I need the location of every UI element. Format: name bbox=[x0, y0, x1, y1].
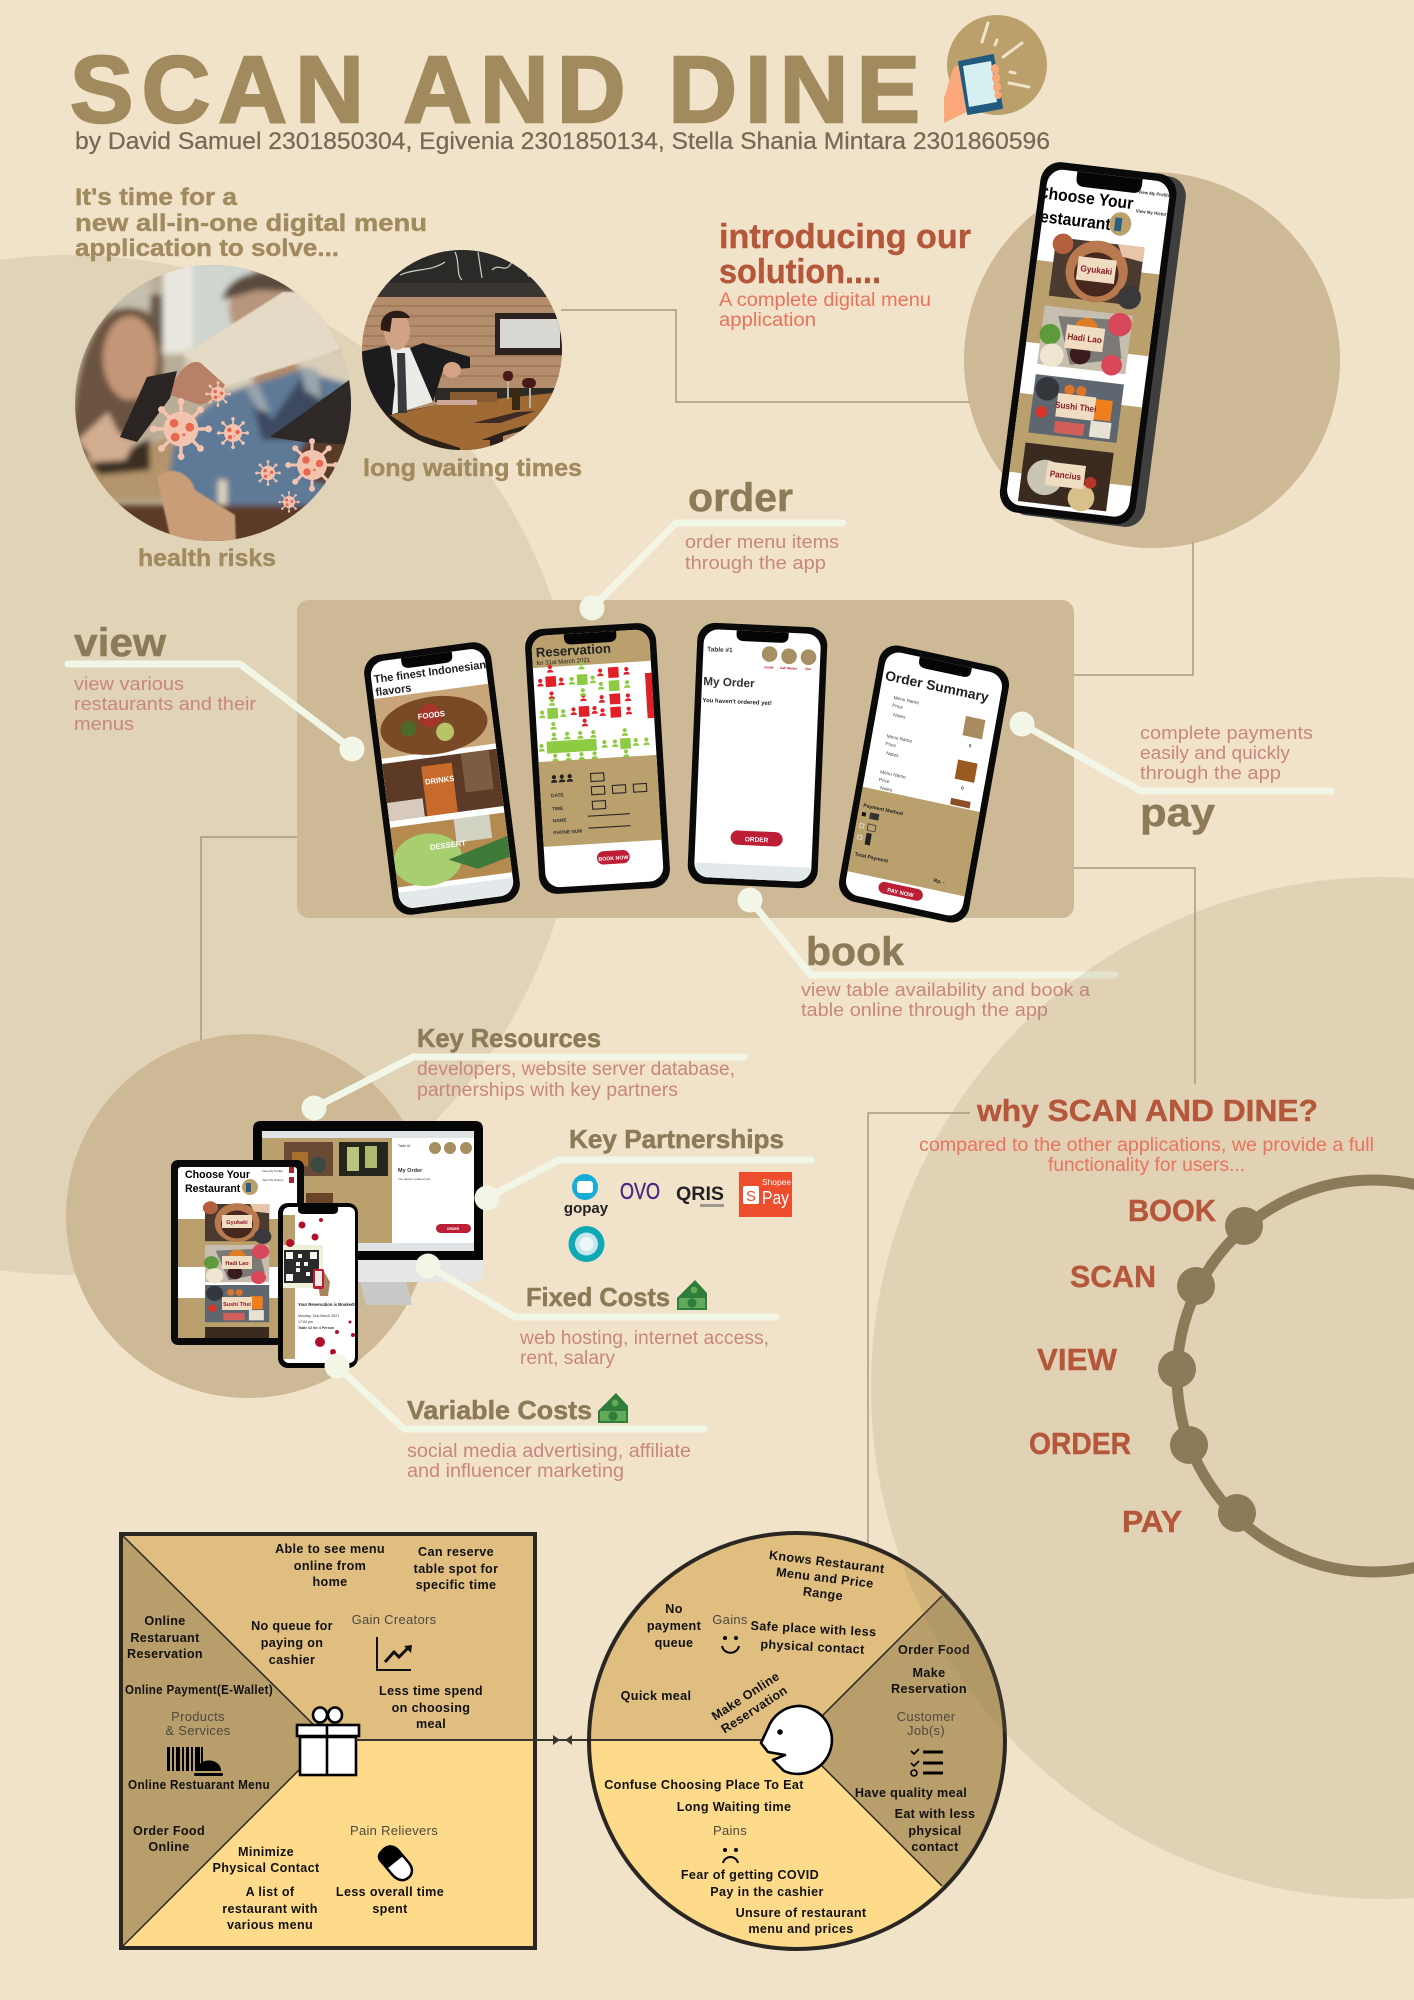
phone: order screen: Table #1 bbox=[707, 646, 733, 654]
text: complete digital menu bbox=[719, 290, 931, 331]
phone: order summary screen: Menu Name bbox=[893, 695, 920, 706]
callout: fixed costs: rent, salary bbox=[520, 1348, 616, 1369]
customer profile circle: Make bbox=[913, 1666, 945, 1680]
value map square: paying on bbox=[261, 1636, 323, 1650]
customer profile circle: Customer bbox=[897, 1709, 956, 1724]
phone: choose your restaurant: View My History bbox=[1135, 208, 1170, 217]
value map square: Products bbox=[171, 1709, 225, 1724]
value map square: spent bbox=[372, 1902, 408, 1916]
heading: introducing our solution bbox=[719, 218, 971, 291]
icon: barcode and cloche bbox=[167, 1747, 223, 1776]
value map square: Gain Creators bbox=[352, 1612, 437, 1627]
text: complete digital menu: application bbox=[719, 310, 816, 331]
label: health risks: health risks bbox=[138, 545, 276, 572]
icon: hand holding phone bbox=[944, 15, 1047, 123]
callout: order: through the app bbox=[685, 552, 826, 573]
phone: order summary screen: Menu Name bbox=[886, 733, 913, 745]
value map square: cashier bbox=[269, 1653, 315, 1667]
feature ring: ORDER bbox=[1029, 1426, 1131, 1461]
customer profile circle: contact bbox=[911, 1840, 959, 1854]
device: phone with QR code: Your Reservation is Booked! bbox=[298, 1302, 355, 1307]
heading: introducing our solution: solution.... bbox=[719, 253, 881, 291]
phone: reservation screen bbox=[524, 622, 671, 895]
customer profile circle: Pains bbox=[713, 1823, 747, 1838]
phone: choose your restaurant: Gyukaki bbox=[1080, 263, 1113, 277]
background circle: key resources bbox=[66, 1034, 430, 1398]
logo: qris: QRIS bbox=[676, 1184, 724, 1205]
phone: view screen: DESSERT bbox=[429, 838, 467, 852]
icon: pill bbox=[379, 1846, 412, 1880]
value map square: Order Food bbox=[133, 1824, 205, 1838]
feature ring: BOOK bbox=[1128, 1193, 1217, 1228]
device: phone with QR code bbox=[278, 1203, 358, 1368]
icon: money bbox=[677, 1280, 707, 1310]
phone: order summary screen: 0 bbox=[961, 785, 965, 792]
phone: view screen bbox=[362, 640, 522, 917]
phone: order summary screen bbox=[836, 642, 1012, 926]
phone: reservation screen: for 31st March 2021 bbox=[536, 658, 591, 667]
phone: view screen: flavors bbox=[375, 682, 412, 699]
callout: pay bbox=[1010, 712, 1331, 835]
callout: order: order menu items bbox=[685, 531, 839, 552]
customer profile circle: Confuse Choosing Place To Eat bbox=[604, 1778, 804, 1792]
phone: order screen bbox=[687, 622, 828, 889]
phone: reservation screen: NAME bbox=[552, 818, 567, 824]
intro heading bbox=[75, 184, 427, 262]
customer profile circle: Knows Restaurant bbox=[768, 1548, 886, 1576]
phone: order summary screen: Notes bbox=[886, 751, 900, 759]
device: phone with QR code: Monday, 31st March 2021 bbox=[298, 1314, 339, 1318]
text: complete digital menu: A complete digital menu bbox=[719, 290, 931, 311]
callout: view bbox=[68, 621, 364, 762]
callout: book: table online through the app bbox=[801, 999, 1048, 1020]
background circle: solution phone bbox=[964, 172, 1340, 548]
value map square: Less overall time bbox=[336, 1885, 444, 1899]
customer profile circle: Long Waiting time bbox=[677, 1800, 791, 1814]
device: phone with QR code: 17:00 pm bbox=[298, 1320, 313, 1324]
value map square: specific time bbox=[416, 1578, 496, 1592]
logo: ovo: OVO bbox=[620, 1178, 660, 1204]
device: tablet: Sushi Thei bbox=[223, 1302, 251, 1308]
value map square: Can reserve bbox=[418, 1545, 494, 1559]
background circle: why overlay bbox=[871, 877, 1414, 1899]
connector lines bbox=[201, 310, 1195, 1543]
customer profile circle: Pay in the cashier bbox=[710, 1885, 824, 1899]
customer profile circle: Safe place with less bbox=[750, 1619, 877, 1639]
phone: order summary screen: Order Summary bbox=[884, 668, 990, 705]
device: desktop monitor: My Order bbox=[398, 1168, 423, 1174]
value map square: Online Restuarant Menu bbox=[128, 1778, 270, 1792]
icon: checklist bbox=[911, 1749, 943, 1776]
value map square: online from bbox=[294, 1559, 366, 1573]
callout: key resources: developers, website server database, bbox=[417, 1059, 735, 1080]
callout: view: view various bbox=[74, 673, 184, 694]
phone: choose your restaurant bbox=[990, 159, 1189, 529]
device: tablet: View My Profile bbox=[262, 1169, 283, 1173]
intro heading: It's time for a bbox=[75, 184, 238, 211]
customer profile circle: Gains bbox=[712, 1612, 748, 1627]
feature ring: PAY bbox=[1122, 1504, 1182, 1539]
phone: view screen: The finest Indonesian bbox=[373, 659, 487, 686]
phone: order summary screen: Menu Name bbox=[880, 769, 907, 781]
value map square: Online bbox=[144, 1614, 186, 1628]
callout: book bbox=[738, 888, 1115, 1020]
subtitle: authors: by David Samuel 2301850304, Egivenia 2301850134, Stella Shania Mintara 2301860596 bbox=[75, 128, 1050, 155]
customer profile circle: Order Food bbox=[898, 1643, 970, 1657]
value map square: Pain Relievers bbox=[350, 1823, 438, 1838]
callout: book: book bbox=[806, 930, 905, 974]
device: tablet: View My History bbox=[262, 1178, 284, 1182]
phone: view screen: DRINKS bbox=[424, 774, 455, 787]
phone: reservation screen: Reservation bbox=[535, 641, 611, 660]
device: tablet: Choose Your bbox=[185, 1169, 250, 1181]
phone: order summary screen: Rp. - bbox=[933, 878, 945, 886]
customer profile circle: queue bbox=[655, 1636, 693, 1650]
phone: choose your restaurant: Hadi Lao bbox=[1067, 331, 1103, 345]
phone: view screen: FOODS bbox=[417, 709, 445, 722]
value map square: Less time spend bbox=[379, 1684, 483, 1698]
value map square: home bbox=[312, 1575, 348, 1589]
customer profile circle: Make Online bbox=[709, 1669, 782, 1723]
customer profile circle: Eat with less bbox=[895, 1807, 975, 1821]
callout: variable costs: social media advertising, affiliate bbox=[407, 1441, 691, 1462]
photo: green drinks bbox=[339, 1142, 388, 1176]
intro heading: application to solve... bbox=[75, 235, 339, 262]
device: desktop monitor: ORDER bbox=[447, 1227, 460, 1231]
value map square: Restaruant bbox=[130, 1631, 200, 1645]
customer profile circle: Reservation bbox=[719, 1683, 790, 1736]
value map square: various menu bbox=[227, 1918, 313, 1932]
customer profile circle: payment bbox=[647, 1619, 702, 1633]
callout: fixed costs: web hosting, internet access, bbox=[519, 1328, 769, 1349]
phone: order screen: My Order bbox=[703, 675, 755, 690]
icon: growth chart bbox=[377, 1637, 412, 1670]
value map square: table spot for bbox=[414, 1562, 498, 1576]
device: tablet: Restaurant bbox=[185, 1183, 241, 1195]
logo: gopay bbox=[564, 1174, 609, 1217]
phone: order screen: You haven't ordered yet! bbox=[702, 698, 772, 707]
value map square: Online bbox=[148, 1840, 190, 1854]
photo: health risks bbox=[70, 260, 360, 550]
customer profile circle: Fear of getting COVID bbox=[681, 1868, 819, 1882]
label: long waiting times: long waiting times bbox=[363, 455, 582, 482]
customer profile circle: Have quality meal bbox=[855, 1786, 967, 1800]
value map square bbox=[121, 1534, 535, 1948]
callout: pay: complete payments bbox=[1140, 722, 1313, 743]
phone: reservation screen: BOOK NOW bbox=[598, 855, 629, 863]
phone: order summary screen: 0 bbox=[968, 743, 972, 750]
callout: order bbox=[580, 476, 843, 620]
phone: choose your restaurant: View My Profile bbox=[1138, 189, 1171, 198]
value map square: No queue for bbox=[251, 1619, 333, 1633]
phone: order summary screen: Price bbox=[878, 777, 890, 785]
callout: pay: through the app bbox=[1140, 762, 1281, 783]
phone: choose your restaurant: Pancius bbox=[1049, 468, 1082, 482]
customer profile circle: Quick meal bbox=[621, 1689, 691, 1703]
background circle: left bbox=[0, 255, 580, 1275]
phone: order screen: Call Waiter bbox=[780, 666, 798, 671]
icon: money bbox=[598, 1393, 628, 1423]
callout: pay: easily and quickly bbox=[1140, 742, 1291, 763]
phone: order summary screen: Price bbox=[892, 703, 904, 711]
customer profile circle: Unsure of restaurant bbox=[736, 1906, 867, 1920]
value map square: Reservation bbox=[127, 1647, 203, 1661]
logo: shopee pay: S bbox=[746, 1188, 756, 1205]
value map square: Online Payment(E-Wallet) bbox=[125, 1683, 273, 1697]
logo: shopee pay: Pay bbox=[762, 1188, 789, 1208]
value map square: on choosing bbox=[392, 1701, 470, 1715]
logo: shopee pay bbox=[739, 1172, 792, 1217]
callout: key resources: partnerships with key partners bbox=[417, 1080, 678, 1101]
customer profile circle: Range bbox=[802, 1584, 844, 1603]
logo: gopay: gopay bbox=[564, 1200, 609, 1217]
phone: order summary screen: Payment Method bbox=[863, 803, 903, 817]
callout: variable costs bbox=[324, 1354, 704, 1482]
customer profile circle: Job(s) bbox=[907, 1723, 945, 1738]
callout: view: menus bbox=[74, 713, 134, 734]
phone: reservation screen: PHONE NUM bbox=[553, 829, 582, 836]
feature ring: SCAN bbox=[1070, 1259, 1156, 1294]
value map square: restaurant with bbox=[222, 1902, 318, 1916]
heading: introducing our solution: introducing our bbox=[719, 218, 971, 256]
phone: choose your restaurant: Restaurant bbox=[1028, 206, 1112, 234]
icons: virus particles bbox=[150, 381, 339, 513]
device: desktop monitor: You haven't ordered yet! bbox=[398, 1177, 430, 1181]
feature ring bbox=[1029, 1180, 1414, 1572]
phone: choose your restaurant: Sushi Thei bbox=[1055, 399, 1097, 414]
customer profile circle: physical contact bbox=[760, 1637, 865, 1657]
value map square: A list of bbox=[246, 1885, 295, 1899]
callout: view: restaurants and their bbox=[74, 693, 256, 714]
device: tablet bbox=[171, 1160, 304, 1345]
feature ring: VIEW bbox=[1037, 1342, 1118, 1377]
value map square: & Services bbox=[165, 1723, 231, 1738]
panel: app screens bbox=[297, 600, 1074, 926]
callout: view: view bbox=[74, 621, 167, 665]
value map square: Physical Contact bbox=[212, 1861, 320, 1875]
device: phone with QR code: Table #2 for 4 Person bbox=[298, 1326, 334, 1330]
customer profile circle: physical bbox=[908, 1824, 962, 1838]
photo: long waiting times bbox=[360, 248, 564, 452]
callout: book: view table availability and book a bbox=[801, 979, 1091, 1000]
value map square: Able to see menu bbox=[275, 1542, 385, 1556]
phone: order screen: ORDER bbox=[745, 836, 769, 844]
callout: key resources: Key Resources bbox=[417, 1023, 601, 1053]
phone: order screen: Bill bbox=[805, 667, 811, 671]
icon: smile bbox=[722, 1636, 739, 1653]
value map square: meal bbox=[416, 1717, 446, 1731]
intro heading: new all-in-one digital menu bbox=[75, 210, 427, 237]
callout: pay: pay bbox=[1140, 791, 1216, 835]
logo: shopee pay: Shopee bbox=[762, 1177, 791, 1187]
callout: key partnerships: Key Partnerships bbox=[569, 1124, 784, 1154]
title: SCAN AND DINE bbox=[70, 37, 920, 143]
phone: order summary screen: Price bbox=[885, 741, 897, 749]
phone: order summary screen: Total Payment bbox=[854, 852, 889, 865]
text: why description: compared to the other applications, we provide a full bbox=[919, 1135, 1374, 1156]
photo: tea bbox=[284, 1142, 333, 1176]
callout: fixed costs bbox=[416, 1254, 776, 1369]
phone: order summary screen: Notes bbox=[893, 712, 906, 721]
phone: order screen: Guide bbox=[764, 665, 774, 670]
value map square: Minimize bbox=[238, 1845, 294, 1859]
callout: variable costs: and influencer marketing bbox=[407, 1461, 624, 1482]
logo: scan and dine plate bbox=[568, 1226, 604, 1262]
phone: order summary screen: Notes bbox=[880, 785, 893, 794]
icon: frown bbox=[723, 1848, 738, 1863]
text: why description: functionality for users... bbox=[1048, 1155, 1245, 1176]
callout: variable costs: Variable Costs bbox=[407, 1395, 592, 1425]
customer profile circle: menu and prices bbox=[748, 1922, 854, 1936]
phone: order summary screen: PAY NOW bbox=[887, 888, 914, 899]
customer profile circle: Menu and Price bbox=[775, 1565, 874, 1591]
callout: key resources bbox=[302, 1023, 744, 1120]
devices mockup bbox=[171, 1121, 483, 1368]
icon: customer head bbox=[761, 1706, 832, 1774]
text: why description bbox=[919, 1135, 1374, 1176]
customer profile circle: Reservation bbox=[891, 1682, 967, 1696]
callout: fixed costs: Fixed Costs bbox=[526, 1282, 670, 1312]
customer profile circle bbox=[589, 1533, 1005, 1949]
device: tablet: Hadi Lao bbox=[225, 1261, 249, 1267]
phone: choose your restaurant: Choose Your bbox=[1036, 183, 1135, 213]
heading: why scan and dine: why SCAN AND DINE? bbox=[976, 1093, 1318, 1128]
callout: key partnerships bbox=[474, 1124, 811, 1262]
device: desktop monitor: Table #1 bbox=[398, 1144, 411, 1148]
phone: reservation screen: TIME bbox=[552, 806, 563, 812]
phone: reservation screen: DATE bbox=[551, 792, 564, 799]
callout: order: order bbox=[688, 476, 793, 520]
device: desktop monitor bbox=[253, 1121, 483, 1305]
customer profile circle: No bbox=[665, 1602, 683, 1616]
device: tablet: Gyukaki bbox=[226, 1220, 248, 1226]
icon: gift bbox=[297, 1708, 359, 1775]
arrows between maps bbox=[356, 1735, 798, 1745]
